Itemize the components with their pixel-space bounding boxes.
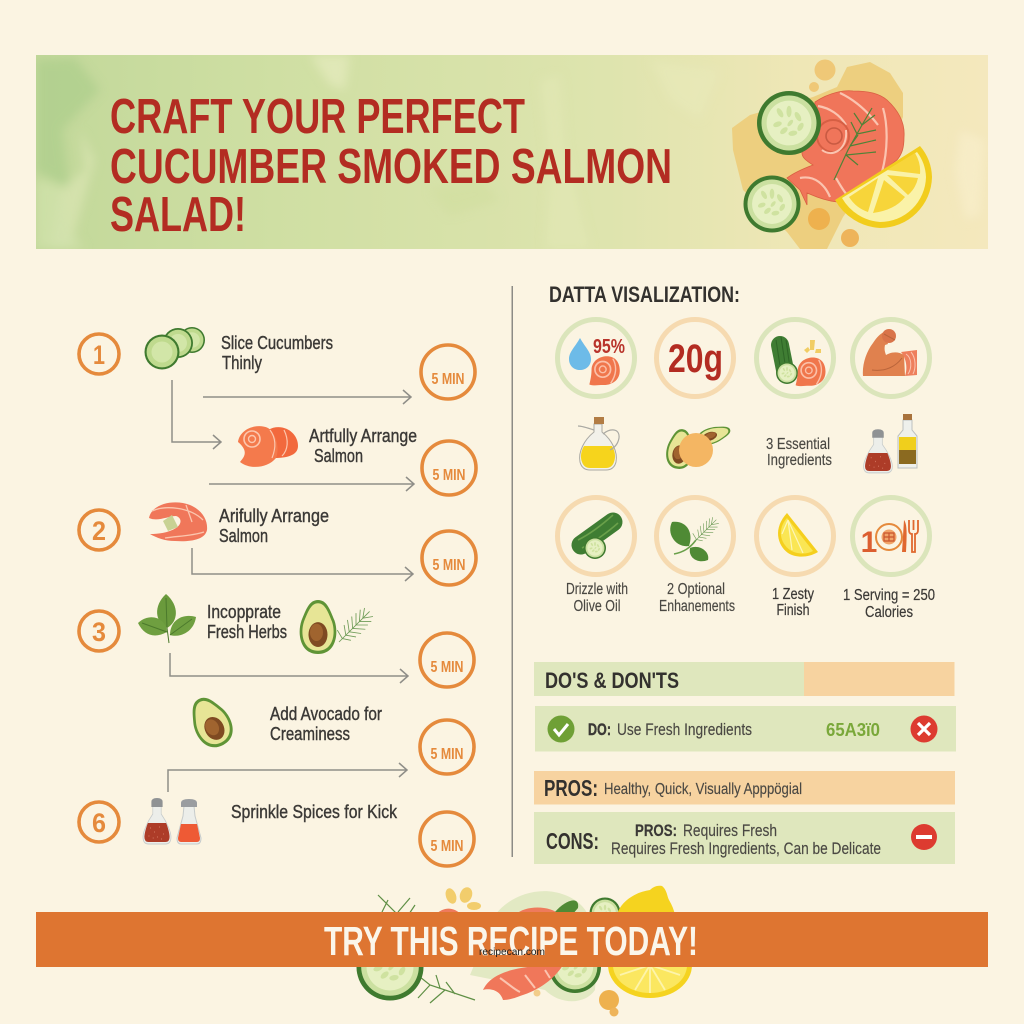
timer 5 min	[422, 441, 476, 495]
icon: salmon steak	[149, 502, 207, 541]
stat: 95% water: 95%	[593, 336, 625, 358]
label: essential ingredients	[766, 436, 832, 469]
step 2 text	[219, 505, 329, 546]
panel: data visualization	[549, 282, 935, 621]
step text: Salmon	[314, 445, 363, 466]
heading: DATTA VISALIZATION:	[549, 282, 740, 307]
icon: avocado and peach	[664, 422, 733, 471]
timer 5 min: 5 MIN	[430, 659, 464, 676]
leaf	[555, 900, 578, 915]
stat: one serving: 1	[861, 526, 877, 559]
stat: cucumber and salmon	[756, 320, 834, 396]
icon: spice shakers	[143, 798, 201, 844]
step 3 text: Fresh Herbs	[207, 621, 287, 642]
timer 5 min	[421, 345, 475, 399]
stat: 95% water	[558, 320, 634, 396]
stat: 20g protein	[656, 320, 734, 396]
stat: muscle arm	[852, 320, 930, 396]
arrow	[192, 548, 413, 581]
step text: Creaminess	[270, 723, 350, 744]
call to action banner: TRY THIS RECIPE TODAY!	[324, 918, 698, 964]
timer 5 min: 5 MIN	[430, 838, 464, 855]
step 6 number: 6	[92, 808, 106, 838]
stat: optional enhancements	[656, 498, 734, 574]
cucumber right	[549, 941, 601, 993]
label: zesty finish: Finish	[776, 602, 810, 619]
stat: 20g protein: 20g	[668, 337, 723, 381]
banner background	[36, 55, 988, 249]
icon: avocado	[183, 690, 239, 754]
watermark: recipecan.com	[479, 947, 545, 958]
salmon slice	[483, 965, 563, 1000]
yellow flecks	[444, 885, 481, 910]
do text: DO:	[588, 721, 611, 739]
title	[110, 90, 672, 242]
stat: drizzle with olive oil	[558, 498, 634, 574]
salmon	[787, 91, 904, 205]
step 6 number	[79, 802, 119, 842]
timer 5 min: 5 MIN	[432, 557, 466, 574]
timer 5 min	[422, 531, 476, 585]
timer 5 min: 5 MIN	[432, 371, 464, 388]
arrow	[209, 477, 414, 491]
cons row: CONS:	[546, 828, 599, 854]
step text	[270, 703, 382, 744]
title: CUCUMBER SMOKED SALMON	[110, 140, 672, 194]
arrow	[170, 653, 408, 683]
label: optional enhancements: 2 Optional	[667, 581, 725, 598]
step 2 number: 2	[92, 516, 106, 546]
dill sprig	[834, 108, 876, 180]
cucumber slices	[757, 91, 821, 155]
step 3 number: 3	[92, 617, 106, 647]
timer 5 min	[420, 812, 474, 866]
label: essential ingredients: 3 Essential	[766, 436, 830, 453]
cons row: Requires Fresh	[683, 822, 777, 840]
cons row: PROS:	[635, 822, 677, 840]
yellow splash	[732, 62, 903, 249]
step 1 text	[221, 332, 333, 373]
footer illustration	[356, 885, 692, 1016]
illustration: salmon, cucumber and lemon	[732, 60, 932, 249]
label: serving calories	[843, 587, 935, 621]
arrow	[203, 390, 411, 404]
label: drizzle with olive oil: Drizzle with	[566, 581, 628, 598]
arrow	[168, 763, 407, 792]
pros row	[534, 771, 955, 804]
label: zesty finish: 1 Zesty	[772, 586, 814, 603]
label: essential ingredients: Ingredients	[767, 452, 832, 469]
panel: do's and don'ts	[534, 662, 956, 864]
heading bar	[534, 662, 954, 696]
step 1 number: 1	[93, 340, 105, 370]
label: optional enhancements	[659, 581, 735, 615]
label: serving calories: 1 Serving = 250	[843, 587, 935, 604]
step text: Add Avocado for	[270, 703, 382, 724]
call to action banner	[36, 912, 988, 967]
icon: spice jar and oil bottle	[864, 414, 917, 473]
step 1 text: Thinly	[222, 352, 263, 373]
cons row	[534, 812, 955, 864]
title: CRAFT YOUR PERFECT	[110, 90, 525, 144]
label: zesty finish	[772, 586, 814, 619]
orange drops	[599, 990, 619, 1010]
stat: one serving	[852, 498, 930, 574]
timer 5 min	[420, 633, 474, 687]
code value: 65A3ï0	[826, 720, 880, 740]
do row	[535, 706, 956, 752]
lemon wedge	[835, 146, 932, 228]
step 3 number	[79, 611, 119, 651]
title: SALAD!	[110, 188, 246, 242]
label: serving calories: Calories	[865, 604, 913, 621]
icon: avocado half and dill	[300, 600, 373, 654]
vertical divider	[512, 286, 513, 857]
pale green wash	[470, 891, 596, 1001]
icon: basil leaves	[138, 594, 196, 643]
step 2 number	[79, 510, 119, 550]
pros row: PROS:	[544, 775, 598, 801]
do text: Use Fresh Ingredients	[617, 721, 752, 739]
step 3 text	[207, 601, 287, 642]
timer 5 min: 5 MIN	[432, 467, 466, 484]
icon: check mark	[548, 716, 574, 742]
icon: olive oil jug	[578, 417, 619, 470]
step 1 number	[79, 334, 119, 374]
step 2 text: Arifully Arrange	[219, 505, 329, 526]
panel: preparation steps	[79, 327, 476, 866]
cons row: Requires Fresh Ingredients, Can be Delicate	[611, 840, 881, 858]
salmon top	[435, 909, 462, 915]
label: drizzle with olive oil: Olive Oil	[574, 598, 620, 615]
watercolor patches	[36, 55, 985, 249]
icon: salmon roll	[238, 426, 298, 467]
label: drizzle with olive oil	[566, 581, 628, 615]
step text	[309, 425, 417, 466]
icon: minus	[911, 824, 937, 850]
step 3 text: Incopprate	[207, 601, 281, 622]
dill	[378, 895, 475, 1003]
timer 5 min: 5 MIN	[430, 746, 464, 763]
icon: cucumber slices	[144, 327, 205, 370]
stat: zesty lemon wedge	[756, 498, 834, 574]
step text: Artfully Arrange	[309, 425, 417, 446]
header banner	[36, 55, 988, 249]
label: optional enhancements: Enhanements	[659, 598, 735, 615]
cucumber top	[590, 898, 620, 928]
timer 5 min	[420, 720, 474, 774]
heading bar: DO'S & DON'TS	[545, 668, 679, 693]
lemon	[608, 886, 692, 998]
step 1 text: Slice Cucumbers	[221, 332, 333, 353]
step 2 text: Salmon	[219, 525, 268, 546]
pros row: Healthy, Quick, Visually Apppögial	[604, 781, 802, 798]
cucumber left	[356, 934, 424, 1000]
arrow	[172, 380, 221, 449]
step 6 text: Sprinkle Spices for Kick	[231, 801, 398, 822]
icon: cross	[910, 716, 938, 742]
